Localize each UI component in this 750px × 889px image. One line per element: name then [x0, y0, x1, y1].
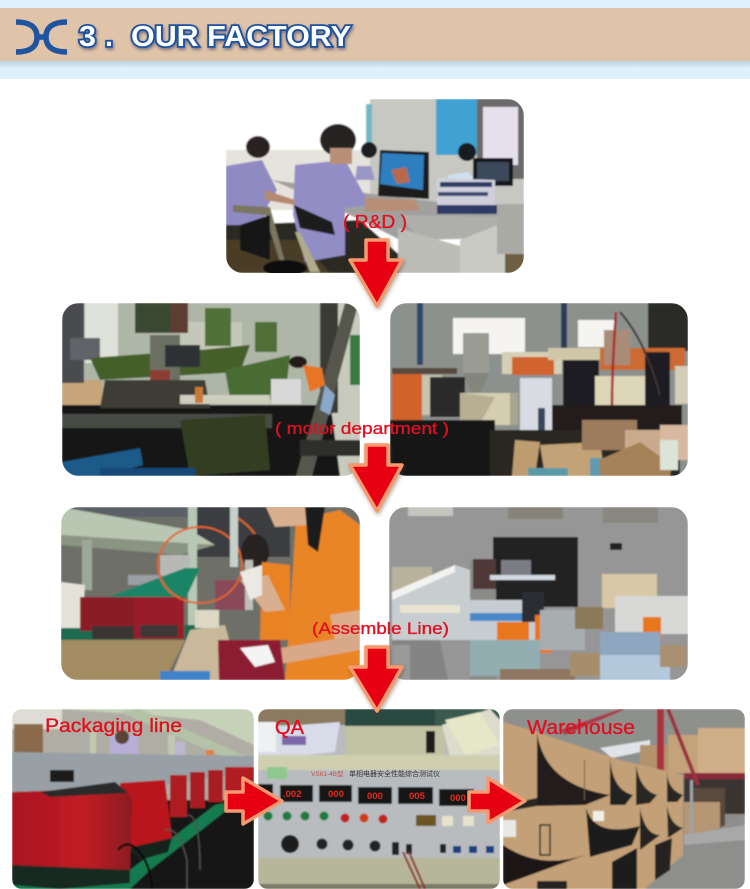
panel: packaging line photo — [12, 709, 254, 889]
panel: QA tester photo — [258, 709, 500, 889]
tester label: VS61-4B型 — [311, 769, 344, 778]
arrow: packaging to QA — [226, 778, 282, 824]
meter readings: 000 — [450, 793, 466, 804]
meter readings: .002 — [283, 789, 302, 800]
heading: . — [105, 21, 113, 53]
meter readings: 005 — [409, 791, 426, 802]
meter readings — [284, 790, 466, 801]
arrow: motor department to assemble line — [350, 445, 402, 511]
label: assemble line: (Assemble Line) — [312, 619, 449, 638]
heading: OUR FACTORY — [131, 21, 351, 53]
panel: warehouse photo — [503, 709, 745, 889]
tester label: 单相电器安全性能综合测试仪 — [349, 769, 440, 778]
label: R&D: ( R&D ) — [343, 212, 407, 232]
arrow: R&D to motor department — [350, 240, 402, 306]
panel: assemble line photo right — [389, 507, 688, 680]
arrow: assemble line to packaging — [350, 647, 402, 711]
meter readings: 000 — [328, 789, 344, 800]
wall of cartons — [503, 722, 683, 889]
belt and shadows — [12, 800, 254, 889]
panel: assemble line photo left — [61, 505, 360, 680]
label: packaging line: Packaging line — [45, 716, 182, 737]
tester label — [311, 770, 440, 777]
label: warehouse: Warehouse — [527, 717, 635, 739]
arrow: QA to warehouse — [469, 778, 525, 823]
heading: 3 — [79, 21, 96, 53]
panel: R&D photo — [226, 99, 524, 276]
panel: injection moulding photo right — [390, 303, 688, 476]
panel: motor department photo left — [62, 303, 360, 476]
meter readings: 000 — [367, 791, 383, 802]
label: motor department: ( motor department ) — [275, 419, 449, 438]
icon: company logo — [16, 22, 67, 52]
header banner — [0, 0, 750, 79]
label: QA: QA — [275, 717, 305, 739]
